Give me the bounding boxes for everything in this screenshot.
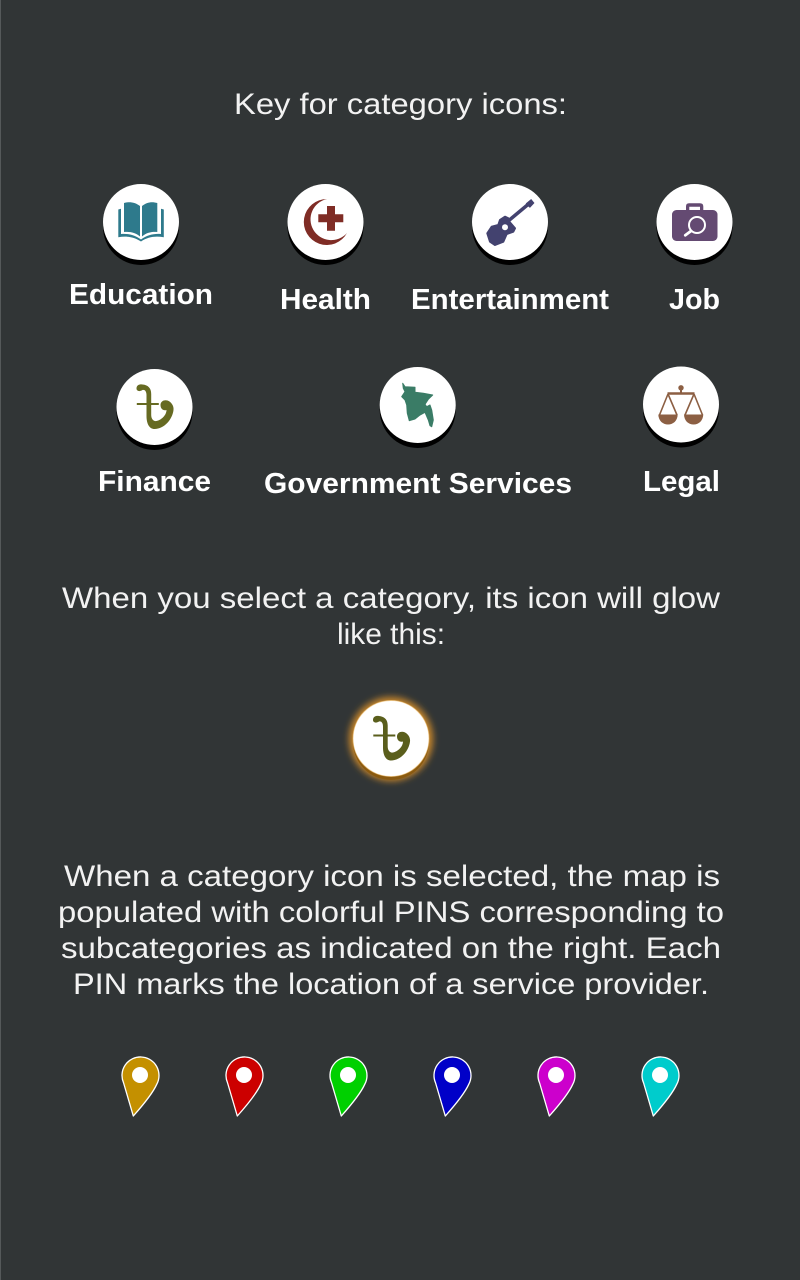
icon: gold pin bbox=[122, 1057, 159, 1116]
label: legal: Legal bbox=[643, 466, 720, 498]
icon: health crescent and cross bbox=[288, 184, 364, 265]
text: map pins explanation: PIN marks the location of a service provider. bbox=[73, 968, 709, 1001]
icon: red pin bbox=[226, 1057, 263, 1116]
icon: legal scales bbox=[643, 366, 719, 448]
label: education: Education bbox=[69, 279, 213, 311]
text: map pins explanation: When a category icon is selected, the map is bbox=[64, 860, 720, 893]
icon: glowing finance example bbox=[349, 697, 433, 781]
text: map pins explanation: populated with colorful PINS corresponding to bbox=[58, 896, 724, 929]
text: glow explanation bbox=[62, 582, 720, 651]
icon: entertainment guitar bbox=[472, 184, 548, 265]
heading: key for category icons: Key for category icons: bbox=[234, 88, 567, 121]
icon: magenta pin bbox=[538, 1057, 575, 1116]
icon: finance taka bbox=[116, 369, 192, 450]
label: health: Health bbox=[280, 284, 371, 316]
icon: green pin bbox=[330, 1057, 367, 1116]
icon: government services Bangladesh map bbox=[380, 367, 456, 448]
text: glow explanation: like this: bbox=[337, 618, 445, 651]
label: government services: Government Services bbox=[264, 468, 572, 500]
text: map pins explanation bbox=[58, 860, 724, 1001]
label: finance: Finance bbox=[98, 466, 211, 498]
text: map pins explanation: subcategories as indicated on the right. Each bbox=[61, 932, 721, 965]
text: glow explanation: When you select a category, its icon will glow bbox=[62, 582, 720, 615]
icon: cyan pin bbox=[642, 1057, 679, 1116]
label: entertainment: Entertainment bbox=[411, 284, 609, 316]
label: job: Job bbox=[669, 284, 720, 316]
icon: job briefcase with magnifier bbox=[656, 184, 732, 265]
icon: education book bbox=[103, 184, 179, 265]
icon: blue pin bbox=[434, 1057, 471, 1116]
